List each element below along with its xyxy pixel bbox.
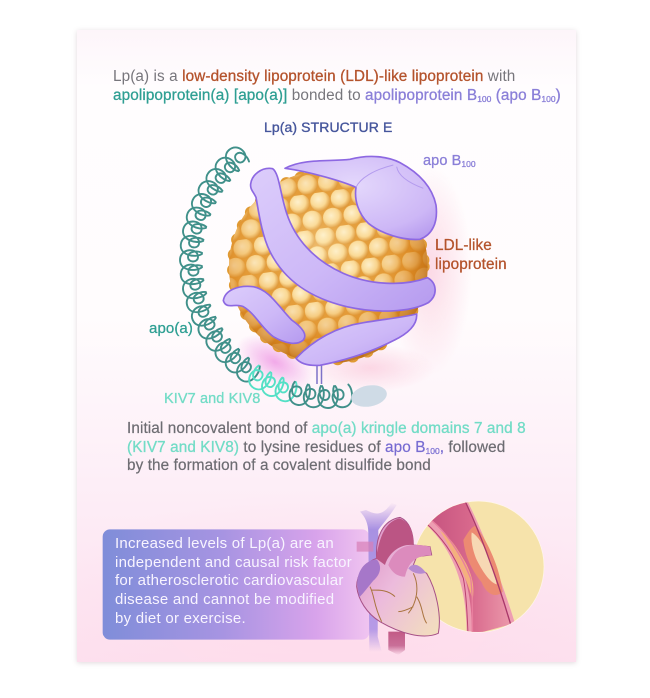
- label: LDL-like lipoprotein: lipoprotein: [435, 256, 507, 272]
- heading: Lp(a) structure: Lp(a) STRUCTUR E: [264, 119, 392, 135]
- background card: [77, 30, 576, 662]
- text: bond description: Initial noncovalent bond of apo(a) kringle domains 7 and 8: [127, 420, 526, 437]
- icon: apo B100 long band: [251, 168, 435, 311]
- panel: callout band: [103, 529, 369, 640]
- text: callout risk statement: disease and cannot be modified: [115, 591, 334, 608]
- icon: apo(a) coil: [180, 143, 353, 408]
- text: callout risk statement: Increased levels of Lp(a) are an: [115, 535, 334, 552]
- icon: apo B100 lower-left band: [223, 286, 305, 343]
- icon: artery cross-section circle: [412, 498, 545, 635]
- text: bond description: by the formation of a covalent disulfide bond: [127, 457, 431, 474]
- text: bond description: [127, 420, 526, 474]
- icon: LDL-like lipoprotein sphere: [227, 172, 430, 366]
- label: apo(a): apo(a): [149, 320, 193, 337]
- icon: apo B100 lower band: [296, 314, 417, 365]
- icon: heart: [357, 503, 439, 655]
- heading: intro statement: [113, 68, 561, 104]
- label: KIV7 and KIV8: KIV7 and KIV8: [164, 391, 260, 407]
- text: bond description: (KIV7 and KIV8) to lysine residues of apo B100, followed: [127, 438, 505, 456]
- heading: intro statement: Lp(a) is a low-density lipoprotein (LDL)-like lipoprotein with: [113, 68, 515, 85]
- text: callout risk statement: for atherosclerotic cardiovascular: [115, 572, 344, 589]
- text: callout risk statement: [115, 535, 352, 627]
- glow around molecule: [228, 165, 472, 401]
- label: apo B100: apo B100: [423, 153, 476, 169]
- text: callout risk statement: by diet or exercise.: [115, 610, 246, 627]
- molecule body in zoomed coordinates: [223, 156, 437, 370]
- label: LDL-like lipoprotein: LDL-like: [435, 237, 492, 254]
- icon: apo B100 top lobe: [285, 156, 436, 240]
- icon: disulfide link stem: [317, 358, 322, 384]
- molecule illustration: Lp(a) structure: [102, 146, 544, 654]
- text: callout risk statement: independent and causal risk factor: [115, 554, 352, 571]
- label: LDL-like lipoprotein: [435, 237, 507, 273]
- icon: grey oval tail: [349, 383, 389, 409]
- heading: intro statement: apolipoprotein(a) [apo(a)] bonded to apolipoprotein B100 (apo B100): [113, 87, 561, 104]
